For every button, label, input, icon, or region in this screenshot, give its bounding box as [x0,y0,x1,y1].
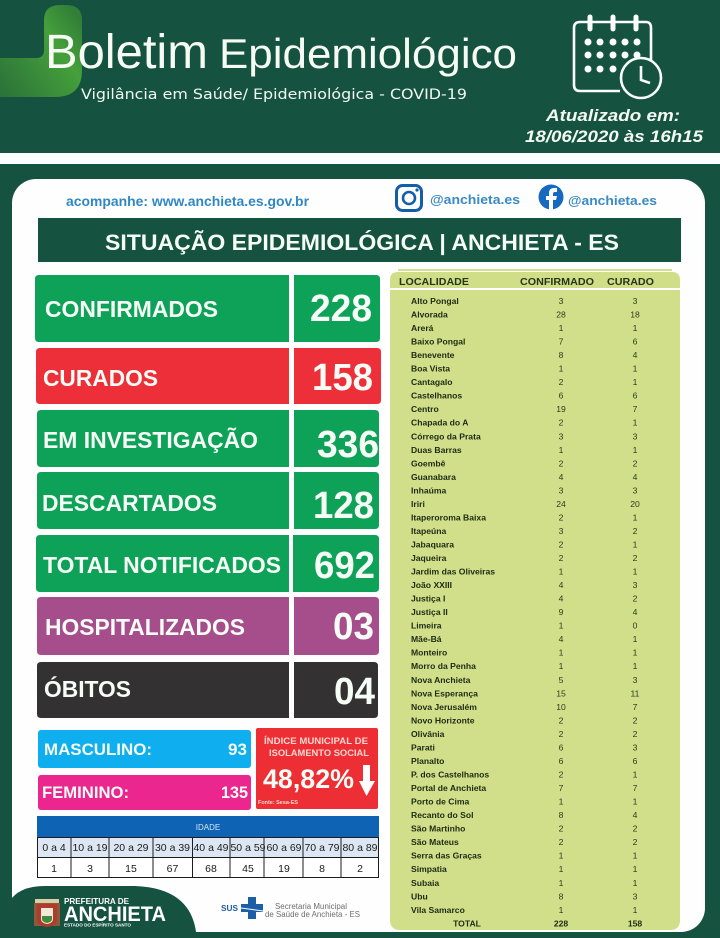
table rows: Jardim das Oliveiras [411,567,495,577]
stat: confirmados [35,275,380,342]
age table: 19 [278,863,290,875]
table rows: São Mateus [411,837,459,847]
table rows: Mãe-Bá [411,634,442,644]
update date: Atualizado em: [545,106,680,125]
stat: total notificados [36,535,379,592]
age table: IDADE [196,823,220,832]
table rows: Portal de Anchieta [411,783,486,793]
stat: em investigacao [37,410,379,467]
callout: isolamento social: ISOLAMENTO SOCIAL [269,748,369,759]
stat: obitos: ÓBITOS [44,675,131,702]
table rows: 28 [556,310,566,320]
table rows: Justiça I [411,594,445,604]
stat: confirmados: CONFIRMADOS [45,296,218,322]
table rows: P. dos Castelhanos [411,770,489,780]
table header [399,276,654,288]
age table: 40 a 49 [193,842,229,854]
table rows: 24 [556,499,566,509]
table rows: 2 [559,540,564,550]
table rows: 1 [633,770,638,780]
table rows: TOTAL [453,918,481,928]
age table: 70 a 79 [304,842,340,854]
table rows: 1 [633,634,638,644]
table rows: 11 [631,688,640,698]
table rows: Serra das Graças [411,851,482,861]
table rows: 9 [559,607,564,617]
table rows: 2 [633,824,638,834]
table rows: Alto Pongal [411,296,459,306]
stat: total notificados: TOTAL NOTIFICADOS [43,552,281,578]
table rows: 1 [633,364,638,374]
table rows: 1 [559,878,564,888]
logo text: ESTADO DO ESPÍRITO SANTO [64,920,132,928]
instagram handle: @anchieta.es [430,192,520,207]
age table: 50 a 59 [230,842,266,854]
logo text: PREFEITURA DE [64,897,130,906]
table rows: 2 [559,837,564,847]
stat: hospitalizados: HOSPITALIZADOS [45,614,245,640]
table rows: Alvorada [411,310,448,320]
table rows: 19 [556,404,566,414]
stat: descartados: DESCARTADOS [42,490,217,516]
table rows: 5 [559,675,564,685]
table rows: 7 [633,702,638,712]
table rows: Iriri [411,499,425,509]
table rows: Morro da Penha [411,661,476,671]
table rows: 4 [559,634,564,644]
stat: hospitalizados [37,597,379,655]
masculino [38,730,251,768]
table rows: Parati [411,742,435,752]
table rows: Jaqueira [411,553,447,563]
table rows: 8 [559,350,564,360]
table rows: 2 [559,377,564,387]
age table: 2 [357,863,363,875]
table rows: 1 [559,567,564,577]
icon: coat of arms [34,899,60,927]
table rows: 3 [559,296,564,306]
table rows: 2 [633,837,638,847]
header band [0,5,704,146]
table rows: 1 [559,445,564,455]
table rows: 1 [633,377,638,387]
table rows: 2 [559,770,564,780]
table rows: 7 [559,783,564,793]
table rows: 2 [633,526,638,536]
table rows: Planalto [411,756,444,766]
table rows: Jabaquara [411,540,454,550]
table rows: 3 [633,296,638,306]
table rows: 3 [633,431,638,441]
table rows: 4 [633,472,638,482]
logo text: ANCHIETA [64,903,166,926]
age table: 30 a 39 [155,842,190,854]
table rows: 1 [559,621,564,631]
table rows: Castelhanos [411,390,462,400]
age table [37,816,379,878]
icon: down arrow [359,765,375,796]
stat: obitos: 04 [334,671,375,713]
callout: isolamento social [256,728,378,809]
table rows: 228 [554,918,568,928]
table rows: Limeira [411,621,442,631]
title: Boletim [45,26,208,79]
table rows: Cantagalo [411,377,453,387]
callout: isolamento social: 48,82% [263,764,354,794]
localidade table [390,269,680,930]
table rows: 3 [633,580,638,590]
age table: 60 a 69 [266,842,302,854]
table rows: 10 [556,702,566,712]
table rows: 4 [559,472,564,482]
table rows: Recanto do Sol [411,810,474,820]
age table: 67 [167,863,178,875]
table rows: Porto de Cima [411,797,469,807]
table rows: 6 [633,336,638,346]
table rows: 1 [633,878,638,888]
table rows: 1 [559,905,564,915]
table rows: 7 [633,404,638,414]
table header: CURADO [607,276,654,288]
stat: total notificados: 692 [314,545,375,587]
table header: LOCALIDADE [399,276,469,288]
table rows: Justiça II [411,607,448,617]
stat: curados: 158 [312,357,373,399]
age table: 8 [319,863,325,875]
table rows: Goembê [411,458,446,468]
table rows: 1 [559,364,564,374]
table rows: 2 [559,512,564,522]
table rows: 4 [633,607,638,617]
callout: isolamento social: ÍNDICE MUNICIPAL DE [264,736,368,747]
title [45,26,517,79]
table rows: Subaia [411,878,439,888]
table rows: Chapada do A [411,418,468,428]
table rows: 4 [633,350,638,360]
table rows: 158 [628,918,642,928]
stat: em investigacao: EM INVESTIGAÇÃO [43,426,258,453]
table rows [411,296,642,928]
table rows: 20 [630,499,640,509]
table rows: Inhaúma [411,485,447,495]
table rows: 6 [559,390,564,400]
table rows: 2 [633,716,638,726]
footer logo tab [12,886,196,938]
table rows: 2 [559,729,564,739]
age table: 1 [51,863,57,875]
table rows: 18 [630,310,640,320]
secretaria text: de Saúde de Anchieta - ES [265,910,360,919]
table rows: 6 [633,756,638,766]
SUS logo [221,897,263,919]
icon: green check logo [0,5,82,97]
table rows: Córrego da Prata [411,431,481,441]
table rows: 1 [633,323,638,333]
table rows: Duas Barras [411,445,462,455]
table rows: Benevente [411,350,455,360]
table rows: 6 [559,756,564,766]
table rows: 3 [633,485,638,495]
age table: 45 [242,863,254,875]
table rows: 2 [559,824,564,834]
feminino: FEMININO: [42,783,129,802]
table rows: 1 [559,323,564,333]
table rows: Nova Anchieta [411,675,471,685]
masculino: MASCULINO: [44,740,152,759]
table rows: 7 [633,783,638,793]
table rows: 1 [559,648,564,658]
table rows: 0 [633,621,638,631]
facebook handle: @anchieta.es [568,193,657,208]
table rows: 4 [633,810,638,820]
age table: 80 a 89 [342,842,378,854]
age table: 3 [87,863,93,875]
stat: descartados [37,472,379,529]
table rows: Ubu [411,891,428,901]
age table: 68 [205,863,217,875]
SUS logo: SUS [221,903,238,913]
table rows: 1 [633,661,638,671]
table rows: Olivânia [411,729,445,739]
table rows: 6 [559,742,564,752]
stat: descartados: 128 [313,485,374,527]
table rows: Simpatia [411,864,447,874]
table rows: 3 [559,431,564,441]
table rows: Vila Samarco [411,905,465,915]
table rows: 1 [633,567,638,577]
stat: obitos [37,662,378,718]
table rows: 1 [633,648,638,658]
table rows: 3 [559,526,564,536]
table rows: 2 [633,594,638,604]
facebook handle [538,184,657,210]
age table: 0 a 4 [42,842,66,854]
table rows: 2 [559,716,564,726]
table rows: 1 [633,445,638,455]
table rows: 1 [633,851,638,861]
main white panel [12,179,705,932]
table rows: João XXIII [411,580,452,590]
table rows: 4 [559,594,564,604]
table rows: 1 [633,864,638,874]
table rows: Guanabara [411,472,456,482]
table rows: Itaperoroma Baixa [411,512,486,522]
title: Epidemiológico [219,30,517,77]
table rows: Boa Vista [411,364,450,374]
masculino: 93 [228,740,247,759]
table rows: 1 [559,661,564,671]
table rows: 1 [633,418,638,428]
table rows: Novo Horizonte [411,716,475,726]
table rows: 3 [633,675,638,685]
table rows: 15 [556,688,566,698]
section heading [38,218,681,262]
update date [525,106,704,146]
update date: 18/06/2020 às 16h15 [525,127,704,146]
icon: calendar with clock [574,17,661,98]
table rows: Centro [411,404,439,414]
table rows: São Martinho [411,824,465,834]
table rows: 1 [633,512,638,522]
table rows: 1 [633,540,638,550]
stat: em investigacao: 336 [317,424,379,466]
age table: 10 a 19 [72,842,108,854]
stat: confirmados: 228 [310,288,372,330]
website link: acompanhe: www.anchieta.es.gov.br [66,193,310,209]
age table: 20 a 29 [113,842,149,854]
table rows: 1 [559,851,564,861]
table rows: 1 [633,797,638,807]
table rows: 2 [633,729,638,739]
table rows: Arerá [411,323,434,333]
table rows: 8 [559,891,564,901]
callout: isolamento social: Fonte: Sesa-ES [258,800,299,806]
section heading: SITUAÇÃO EPIDEMIOLÓGICA | ANCHIETA - ES [105,230,619,255]
table rows: 7 [559,336,564,346]
subtitle: Vigilância em Saúde/ Epidemiológica - COVID-19 [81,87,467,103]
table rows: Monteiro [411,648,447,658]
age table: 15 [125,863,137,875]
table rows: 6 [633,390,638,400]
table rows: 1 [559,797,564,807]
table rows: Itapeúna [411,526,447,536]
table rows: Baixo Pongal [411,336,465,346]
table rows: 2 [633,458,638,468]
stat: hospitalizados: 03 [333,606,374,648]
table rows: 3 [559,485,564,495]
table header: CONFIRMADO [520,276,594,288]
secretaria text [265,902,360,919]
table rows: 1 [559,864,564,874]
table rows: 3 [633,891,638,901]
stat: curados [36,348,381,404]
table rows: 4 [559,580,564,590]
table rows: 3 [633,742,638,752]
table rows: Nova Esperança [411,688,478,698]
table rows: Nova Jerusalém [411,702,477,712]
secretaria text: Secretaria Municipal [275,902,347,911]
table rows: 2 [559,553,564,563]
feminino: 135 [221,783,248,802]
white divider strip [0,153,720,164]
table rows: 8 [559,810,564,820]
table rows: 1 [633,905,638,915]
feminino [38,775,251,810]
instagram handle [396,186,520,210]
table rows: 2 [559,458,564,468]
table rows: 2 [559,418,564,428]
stat: curados: CURADOS [43,365,158,391]
table rows: 2 [633,553,638,563]
